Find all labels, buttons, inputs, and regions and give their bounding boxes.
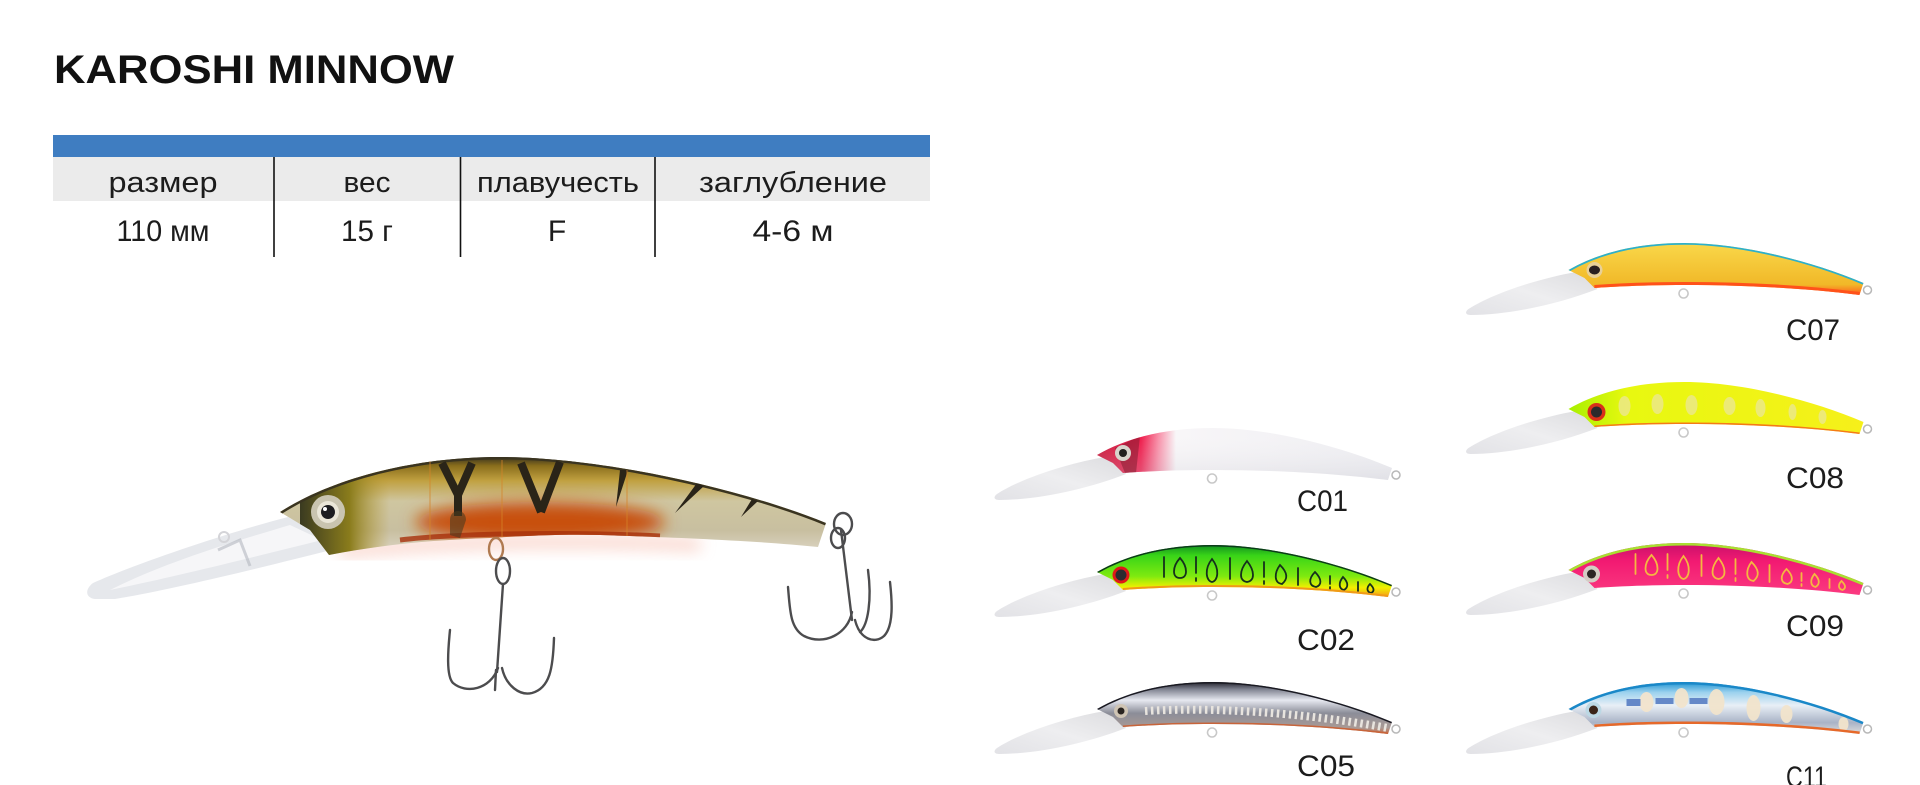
belly treble hook (448, 538, 554, 694)
main lure illustration (87, 457, 892, 694)
label: C05: C05 (1297, 750, 1355, 783)
label: C07: C07 (1786, 314, 1840, 347)
label: C02: C02 (1297, 624, 1355, 657)
label: size: размер (108, 167, 218, 199)
spec table (53, 135, 930, 257)
eye (1586, 262, 1602, 278)
lip (87, 517, 335, 599)
eye (1588, 403, 1606, 421)
eye (1115, 445, 1131, 461)
value: weight: 15 г (341, 215, 393, 248)
value: buoyancy: F (548, 215, 566, 248)
label: C09: C09 (1786, 610, 1844, 643)
table header bar (53, 135, 930, 157)
table label row background (53, 157, 930, 201)
lure C11 (1466, 682, 1872, 754)
eye (311, 495, 345, 529)
value: size: 110 мм (116, 215, 210, 248)
title: KAROSHI MINNOW (54, 48, 454, 92)
lure C09 (1466, 543, 1872, 615)
eye (1112, 566, 1130, 584)
lure C01 (995, 428, 1400, 500)
label: C01: C01 (1297, 485, 1348, 518)
stripes (442, 462, 560, 516)
label: C08: C08 (1786, 462, 1844, 495)
label: weight: вес (344, 167, 390, 199)
lure C07 (1466, 243, 1872, 315)
column dividers (274, 157, 655, 257)
lure C05 (995, 682, 1400, 754)
lure C08 (1466, 382, 1872, 454)
label: buoyancy: плавучесть (477, 167, 639, 199)
lure body (280, 457, 826, 555)
tail treble hook (788, 513, 892, 640)
eye (1586, 702, 1602, 718)
lure C02 (995, 545, 1400, 617)
eye (1114, 704, 1128, 718)
eye (1583, 566, 1600, 582)
value: depth: 4-6 м (752, 215, 834, 248)
label: depth: заглубление (699, 167, 887, 199)
